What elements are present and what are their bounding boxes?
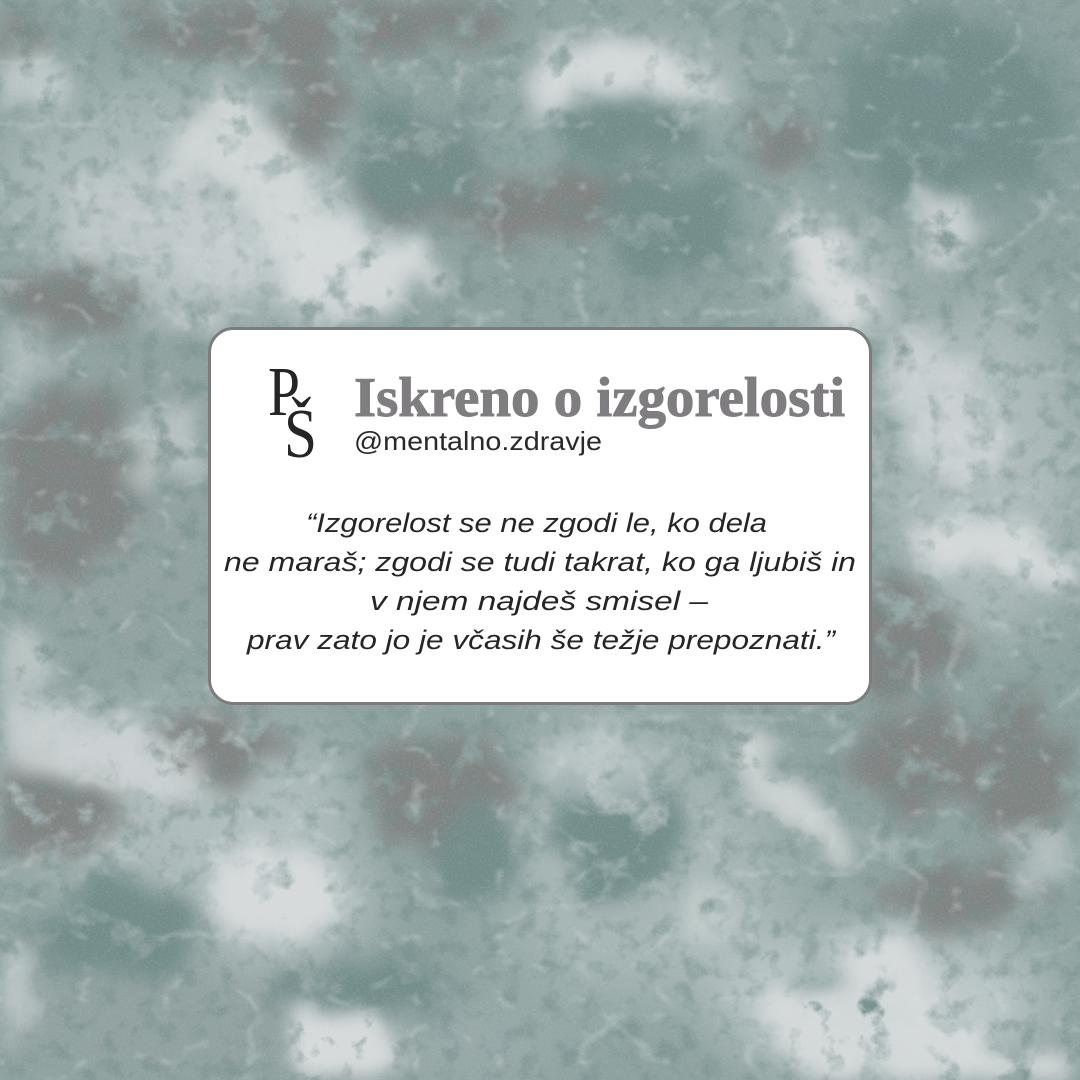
quote text: “Izgorelost se ne zgodi le, ko dela xyxy=(306,508,767,538)
logo: PŠ monogram: P xyxy=(268,354,300,431)
quote text xyxy=(224,508,856,655)
quote text: prav zato jo je včasih še težje prepoznati.” xyxy=(246,625,836,655)
heading: Iskreno o izgorelosti xyxy=(354,367,845,429)
logo: PŠ monogram xyxy=(268,354,317,473)
logo: PŠ monogram: Š xyxy=(284,396,317,473)
quote text: v njem najdeš smisel – xyxy=(370,586,709,616)
handle: @mentalno.zdravje xyxy=(354,426,602,456)
quote text: ne maraš; zgodi se tudi takrat, ko ga ljubiš in xyxy=(224,547,856,577)
panel: quote card xyxy=(210,328,870,704)
